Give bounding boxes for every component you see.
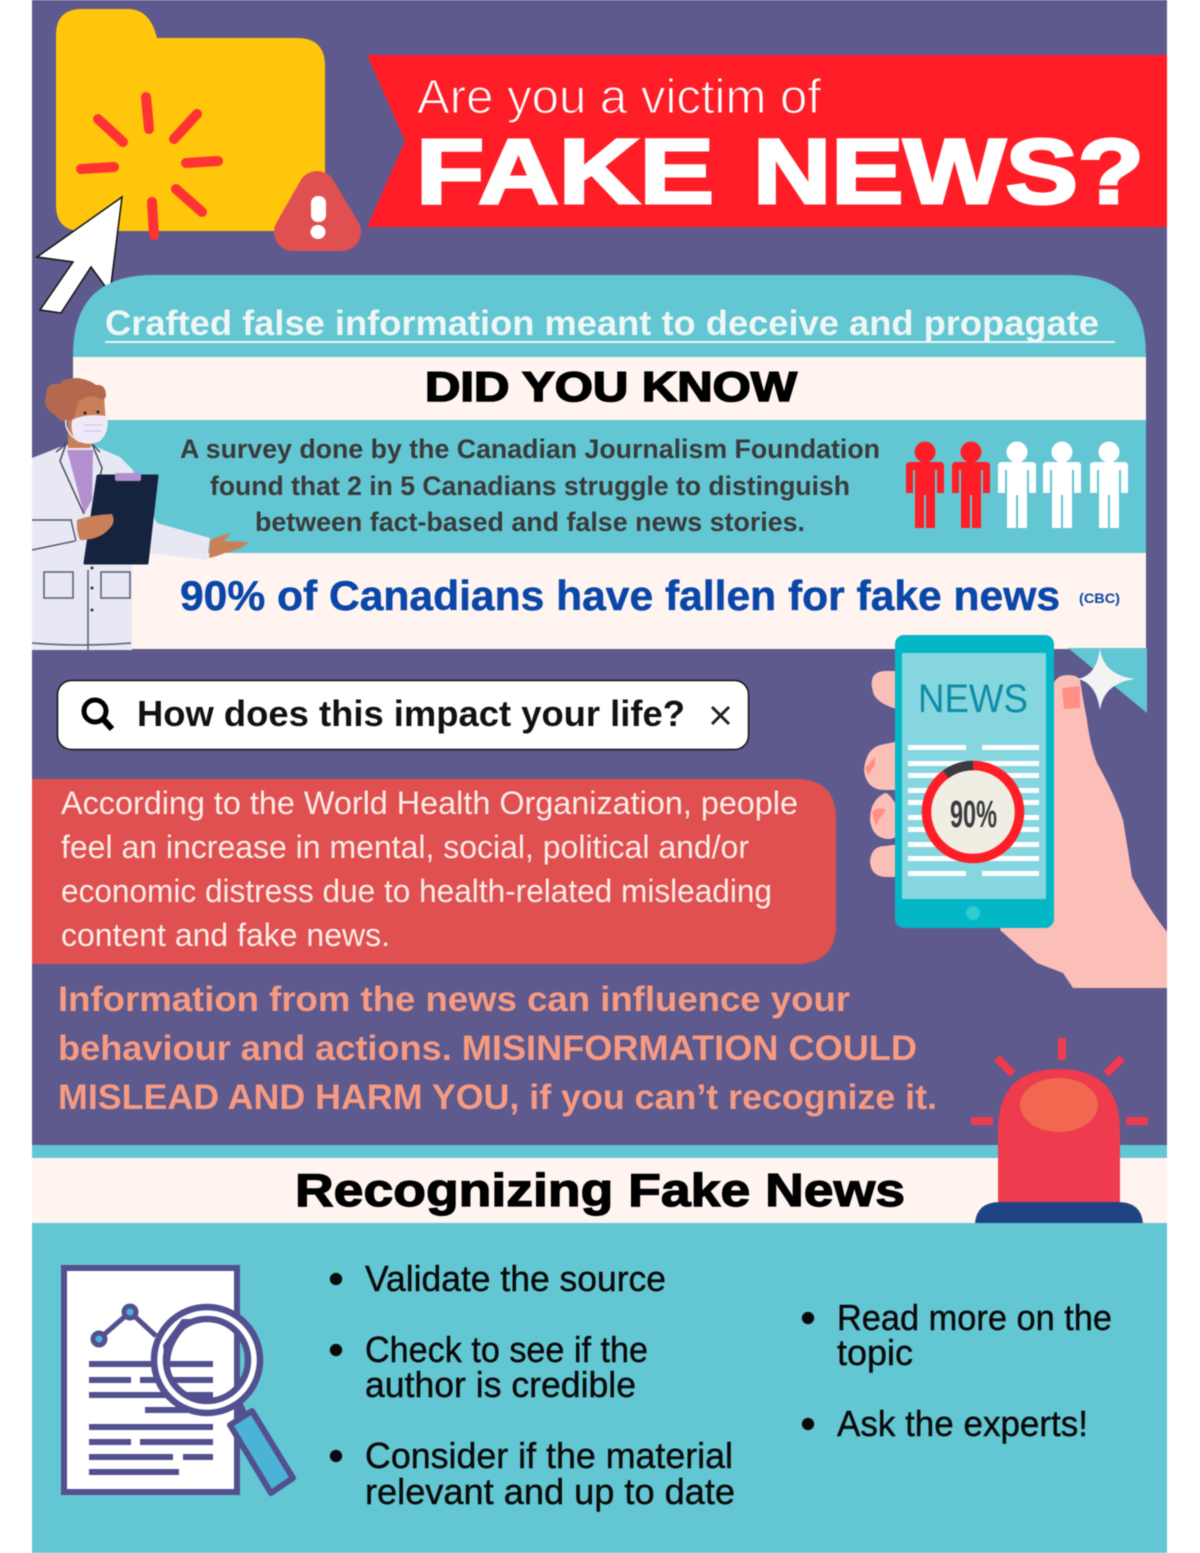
panel: WHO distress text: [32, 779, 836, 964]
heading: recognizing fake news: Recognizing Fake News: [295, 1164, 905, 1216]
90 percent statistic: (CBC): [1079, 590, 1120, 606]
icon: warning triangle: [293, 190, 342, 239]
panel: WHO distress text: feel an increase in mental, social, political and/or: [61, 829, 749, 865]
list: tips column two: topic: [837, 1332, 913, 1373]
title: main line: FAKE: [416, 121, 714, 223]
icon: 2 in 5 people pictogram: [906, 442, 1128, 528]
list: tips column two: [802, 1297, 1112, 1444]
list: tips column one: relevant and up to date: [365, 1471, 735, 1512]
icon: sparkle: [1078, 648, 1135, 710]
icon: document under magnifier: [64, 1268, 293, 1493]
90 percent ring gauge: 90%: [950, 794, 997, 836]
search bar: How does this impact your life?: [137, 693, 685, 734]
90 percent statistic: 90% of Canadians have fallen for fake news: [180, 572, 1060, 619]
survey statistic band: between fact-based and false news stories.: [255, 507, 805, 537]
panel: WHO distress text: According to the World Health Organization, people: [61, 785, 798, 821]
panel: WHO distress text: economic distress due to health-related misleading: [61, 873, 772, 909]
survey statistic band: found that 2 in 5 Canadians struggle to distinguish: [210, 471, 850, 501]
heading: did you know: [73, 357, 1146, 420]
title: small line: Are you a victim of: [417, 71, 822, 124]
text block: misinformation warning: behaviour and actions. MISINFORMATION COULD: [58, 1029, 917, 1068]
panel: WHO distress text: content and fake news.: [61, 917, 390, 953]
tagline banner: [73, 275, 1146, 357]
icon: close: [712, 707, 729, 724]
title banner: [367, 55, 1167, 227]
text block: misinformation warning: [58, 980, 937, 1117]
survey statistic band: [73, 420, 1146, 553]
tagline banner: Crafted false information meant to deceive and propagate: [105, 304, 1099, 343]
list: tips column one: [330, 1258, 735, 1512]
panel: recognizing fake news: [32, 1145, 1167, 1553]
list: tips column one: author is credible: [365, 1364, 636, 1405]
title: main line: NEWS?: [753, 121, 1144, 223]
icon: magnifying glass: [84, 700, 112, 729]
title: main line: [416, 121, 1144, 223]
90 percent ring gauge: [926, 766, 1020, 858]
text block: misinformation warning: Information from the news can influence your: [58, 980, 850, 1019]
icon: red alarm beacon: [971, 1038, 1148, 1223]
illustration: doctor with clipboard: [32, 378, 249, 650]
icon: yellow folder with click burst: [56, 9, 325, 235]
illustration: hand holding phone with news: [864, 635, 1167, 988]
list: tips column one: Validate the source: [365, 1258, 666, 1299]
list: tips column one: Check to see if the: [365, 1329, 648, 1370]
phone: [895, 635, 1054, 928]
list: tips column two: Read more on the: [837, 1297, 1112, 1338]
list: tips column one: Consider if the material: [365, 1435, 733, 1476]
survey statistic band: A survey done by the Canadian Journalism Foundation: [180, 434, 880, 464]
icon: mouse cursor: [37, 197, 122, 313]
search bar: [58, 680, 748, 750]
panel: did you know: [73, 275, 1146, 649]
text block: misinformation warning: MISLEAD AND HARM YOU, if you can’t recognize it.: [58, 1078, 937, 1117]
phone: NEWS: [918, 677, 1028, 721]
90 percent statistic: [73, 553, 1146, 649]
heading: did you know: DID YOU KNOW: [425, 363, 797, 410]
list: tips column two: Ask the experts!: [837, 1403, 1088, 1444]
